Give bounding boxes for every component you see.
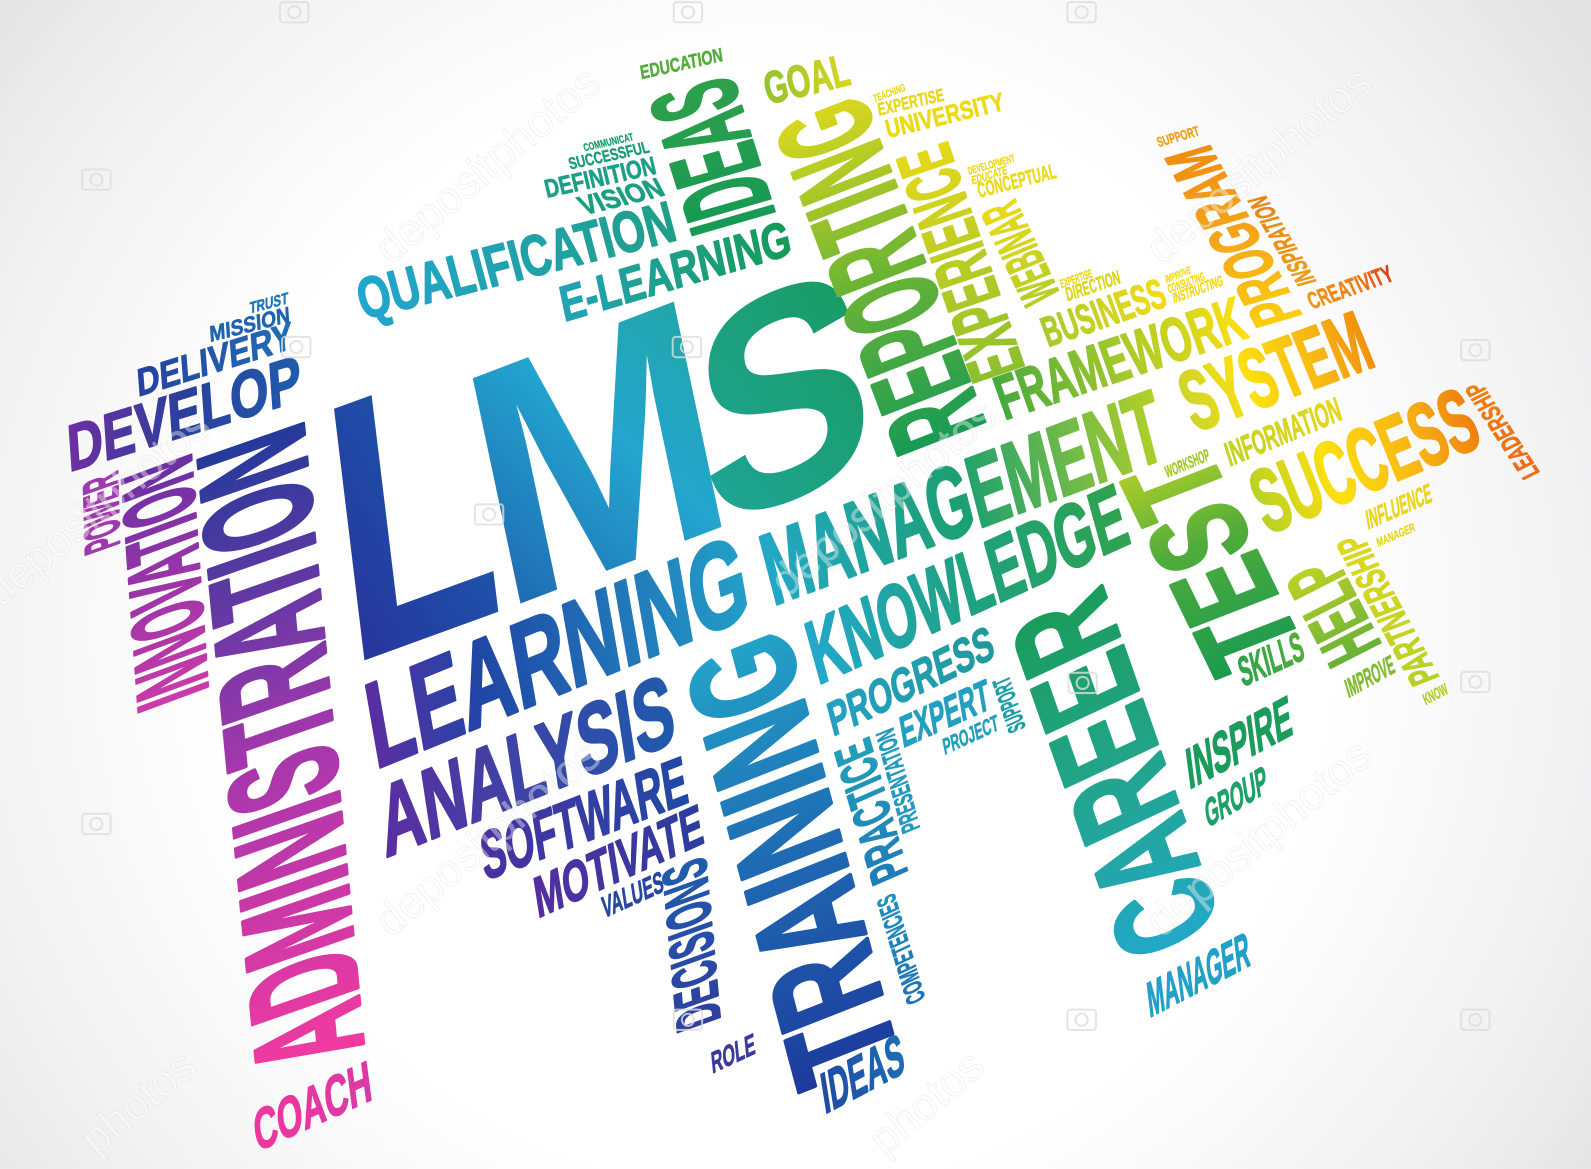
word cloud: COACH [250,1048,375,1164]
word cloud: ROLE [710,1027,757,1080]
word cloud: SKILLS [1234,623,1308,696]
watermark camera icons [82,2,1490,1030]
word cloud: CONSULTING [1166,269,1206,296]
word cloud: MISSION [209,302,291,347]
word cloud: EXPERTISE [1059,267,1093,291]
watermark text: depositphotos [761,390,1006,606]
word cloud: SUPPORT [1155,123,1201,150]
word cloud: VISION [572,172,669,220]
watermark text: photos [860,1041,994,1164]
word: LMS [307,195,885,745]
word cloud: SUPPORT [987,673,1031,737]
watermark text: depositphotos [1137,730,1381,946]
word cloud: DIRECTION [1063,266,1122,306]
watermark text: depositphotos [366,57,610,274]
word cloud: PROJECT [941,710,1000,760]
word cloud: VALUES [600,865,666,925]
word cloud: KNOW [1420,680,1450,709]
word cloud: EDUCATE [971,163,1008,187]
word cloud: EXPERT [896,670,993,757]
word cloud: POWER [73,466,131,561]
word cloud: COMMUNICAT [582,131,635,154]
word cloud: DEVELOPMENT [966,152,1016,177]
word: LMS: L [307,279,516,745]
word cloud: WORKSHOP [1163,445,1211,482]
word cloud: HELP [1269,546,1398,679]
word cloud: TEACHING [872,81,907,105]
watermark text: photos [71,1041,205,1164]
word cloud: TRUST [250,289,288,317]
word cloud: DELIVERY [135,313,294,405]
word cloud: IMPROVE [1165,264,1192,286]
watermark text: depositphotos [366,730,610,946]
word: LMS: M [439,224,756,681]
word cloud: IDEAS [817,1021,908,1126]
word: LEARNING MANAGEMENT [357,369,1174,794]
watermark text: depositphotos [1137,57,1381,274]
word cloud: GROUP [1202,757,1270,836]
word: LMS: S [681,195,885,594]
